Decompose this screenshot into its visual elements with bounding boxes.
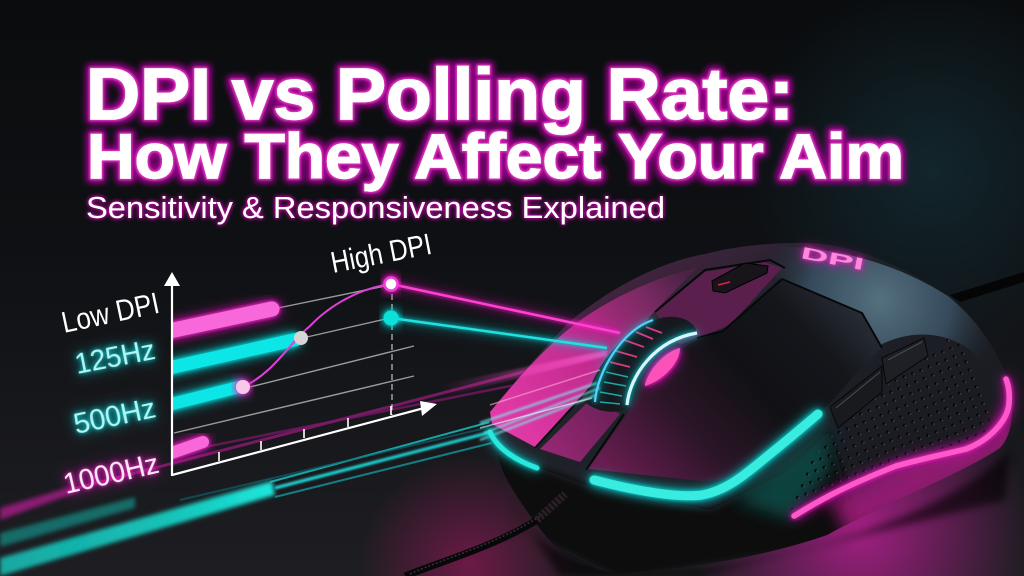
curve [243,284,391,387]
axes [164,272,437,476]
title line 2: How They Affect Your Aim [87,122,904,192]
left click button [490,268,697,447]
mouse [391,243,1020,576]
bars [160,309,298,457]
label: 1000Hz: 1000Hz [60,448,162,501]
DPI logo: DPI [799,243,866,274]
motion streaks [0,352,600,576]
cyan left strip [490,432,537,468]
mouse body [489,243,1012,573]
grid lines [174,285,414,433]
right click button [588,279,882,481]
curve dots [236,278,398,394]
chart [59,228,437,501]
soft shading [490,246,1020,576]
beam: cyan [391,318,607,348]
label: 500Hz: 500Hz [71,392,159,441]
label: High DPI: High DPI [328,228,434,280]
wheel pink slot [645,348,680,386]
side buttons [830,366,882,428]
label: 125Hz: 125Hz [72,334,158,381]
wheel glow arcs [595,320,653,402]
pink light strip [794,379,1009,516]
bar: 500Hz cyan [160,386,243,407]
bar: 1000Hz pink [160,442,203,457]
bar: 125Hz cyan [160,339,298,370]
cable [405,494,565,576]
dashed guide [391,284,393,415]
title line 1: DPI vs Polling Rate: [86,55,794,135]
center strip lower [540,398,620,462]
subtitle: Sensitivity & Responsiveness Explained [86,190,665,225]
beam: pink [391,284,620,333]
DPI button [712,263,768,293]
bar: low DPI pink [160,309,272,333]
cyan light strip [594,414,818,496]
label: Low DPI: Low DPI [59,287,162,340]
side grip dots [790,338,990,510]
scroll wheel [585,317,697,412]
mouse shadow [510,450,1010,576]
center strip upper [655,262,782,345]
beam: fan of light [440,350,607,440]
